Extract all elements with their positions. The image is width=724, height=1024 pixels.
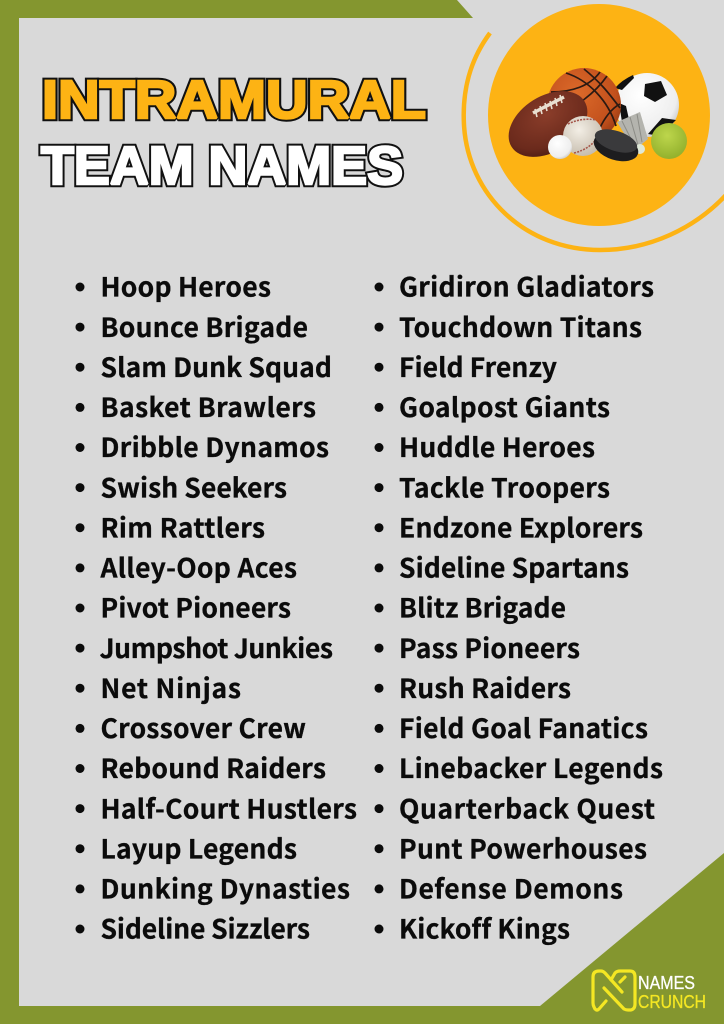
icon: shuttlecock [617, 112, 648, 154]
names list: Blitz Brigade [399, 587, 566, 626]
names list [399, 266, 663, 947]
names list: Dunking Dynasties [100, 868, 350, 907]
icon: hockey puck [590, 125, 642, 166]
names list: Tackle Troopers [399, 466, 610, 505]
orange sun circle [488, 4, 710, 226]
names list: Jumpshot Junkies [100, 627, 333, 666]
names list: Alley-Oop Aces [100, 547, 297, 586]
names list: Touchdown Titans [399, 306, 642, 345]
names list: Field Frenzy [399, 346, 557, 385]
title line: Intramural: INTRAMURAL [42, 70, 426, 130]
names list: Pivot Pioneers [100, 587, 291, 626]
names list: Rush Raiders [399, 667, 571, 706]
icon: baseball [563, 116, 603, 156]
names list: Punt Powerhouses [399, 827, 647, 866]
logo word: Crunch: CRUNCH [638, 992, 706, 1012]
team names column one [76, 266, 357, 947]
icon: basketball [547, 68, 621, 142]
green frame: top and left band [0, 0, 473, 1024]
sports balls illustration [497, 68, 687, 171]
names list: Net Ninjas [100, 667, 241, 706]
names list: Dribble Dynamos [100, 426, 329, 465]
names list: Pass Pioneers [399, 627, 580, 666]
title line: Team Names: TEAM NAMES [41, 136, 403, 196]
logo word: Names: NAMES [638, 973, 695, 993]
title [41, 70, 426, 196]
names list: Bounce Brigade [100, 306, 308, 345]
names list: Goalpost Giants [399, 386, 610, 425]
names list: Kickoff Kings [399, 908, 570, 947]
logo: Names Crunch [593, 971, 706, 1012]
title line: Team Names: TEAM NAMES [41, 136, 403, 196]
names list: Crossover Crew [100, 707, 306, 746]
orange arc ring [464, 33, 724, 250]
icon: golf ball [548, 135, 572, 159]
names list: Rebound Raiders [100, 747, 326, 786]
green corner: bottom band and diagonal [0, 853, 724, 1024]
names list: Basket Brawlers [100, 386, 316, 425]
names list: Layup Legends [100, 827, 297, 866]
names list: Hoop Heroes [100, 266, 271, 305]
icon: N mark [593, 971, 635, 1010]
title line: Intramural: INTRAMURAL [42, 70, 426, 130]
icon: tennis ball [651, 123, 687, 159]
icon: football [497, 77, 599, 171]
names list: Sideline Spartans [399, 547, 629, 586]
names list: Defense Demons [399, 868, 623, 907]
icon: soccer ball [615, 73, 679, 137]
names list: Linebacker Legends [399, 747, 663, 786]
names list: Slam Dunk Squad [100, 346, 332, 385]
names list: Rim Rattlers [100, 506, 265, 545]
names list: Sideline Sizzlers [100, 908, 310, 947]
names list: Field Goal Fanatics [399, 707, 648, 746]
names list: Gridiron Gladiators [399, 266, 654, 305]
team names column two [374, 266, 663, 947]
bullet markers [76, 282, 84, 934]
names list: Huddle Heroes [399, 426, 595, 465]
names list: Half-Court Hustlers [100, 787, 357, 826]
names list: Swish Seekers [100, 466, 287, 505]
names list: Quarterback Quest [399, 787, 655, 826]
bullet markers [374, 282, 384, 934]
names list: Endzone Explorers [399, 506, 643, 545]
names list [100, 266, 357, 947]
